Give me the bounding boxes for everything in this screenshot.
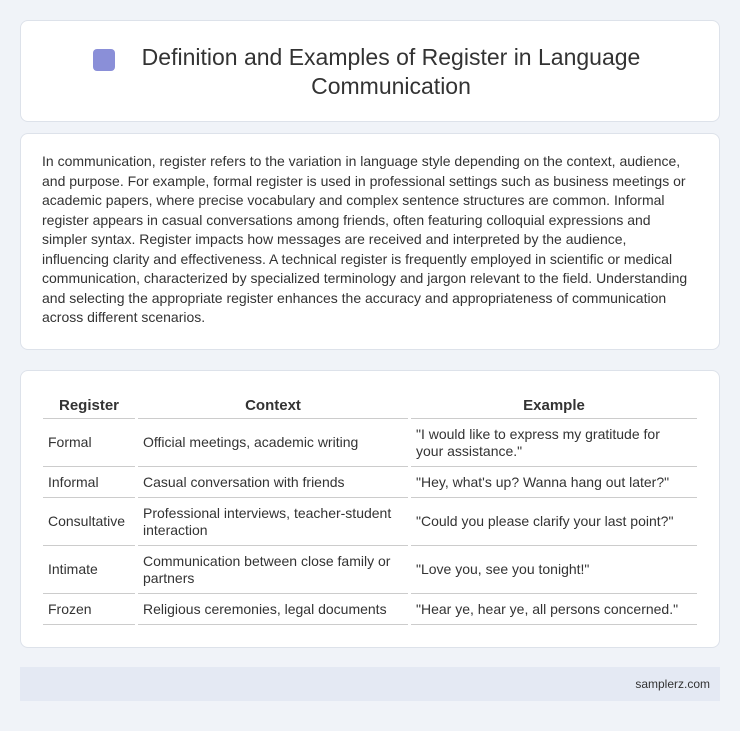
register table: "Hear ye, hear ye, all persons concerned." — [416, 600, 678, 616]
register table: Context — [245, 397, 301, 414]
footer text: samplerz.com — [635, 677, 710, 691]
register table: "I would like to express my gratitude for your assistance." — [416, 426, 660, 458]
panel: header — [20, 20, 720, 122]
register table: Formal — [48, 434, 92, 450]
register table: "Hey, what's up? Wanna hang out later?" — [416, 474, 669, 490]
register table: Intimate — [48, 561, 98, 577]
register table: "Could you please clarify your last point?" — [416, 513, 673, 529]
icon: calendar — [93, 49, 115, 71]
register table: "Love you, see you tonight!" — [416, 561, 589, 577]
panel: table — [20, 370, 720, 648]
panel: description — [20, 133, 720, 350]
text block: In communication, register refers to the variation in language style depending on the context, audience, and purpose. For example, formal register is used in professional settings such as business meetings or academic papers, where precise vocabulary and complex sentence structures are common. Informal register appears in casual conversations among friends, often featuring colloquial expressions and simpler syntax. Register impacts how messages are received and interpreted by the audience, influencing clarity and effectiveness. A technical register is frequently employed in scientific or medical communication, characterized by specialized terminology and jargon relevant to the field. Understanding and selecting the appropriate register enhances the accuracy and appropriateness of communication across different scenarios. — [42, 153, 687, 325]
register table: Consultative — [48, 513, 125, 529]
register table — [43, 397, 697, 625]
register table: Frozen — [48, 600, 92, 616]
register table: Official meetings, academic writing — [143, 434, 358, 450]
register table: Casual conversation with friends — [143, 474, 345, 490]
register table: Register — [59, 397, 119, 414]
register table: Professional interviews, teacher-student interaction — [143, 504, 391, 538]
register table: Example — [523, 397, 585, 414]
register table: Informal — [48, 474, 99, 490]
title: Definition and Examples of Register in Language Communication — [142, 44, 640, 99]
register table: Communication between close family or partners — [143, 552, 390, 586]
footer — [20, 667, 720, 701]
register table: Religious ceremonies, legal documents — [143, 600, 387, 616]
